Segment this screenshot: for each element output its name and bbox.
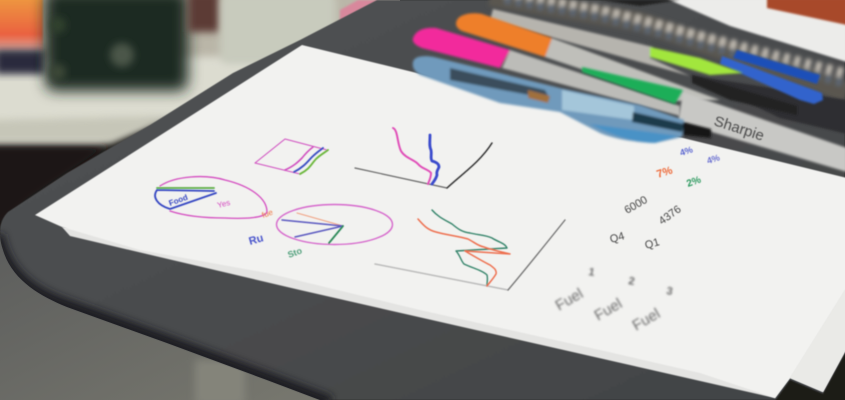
lower sheet edge at right bbox=[790, 287, 845, 392]
pie chart: left with wedge and labels: Yes bbox=[216, 198, 231, 210]
blurred row labels: Fuel bbox=[592, 295, 625, 324]
blurred row labels: Fuel bbox=[630, 305, 663, 334]
blurred row labels: 2 bbox=[627, 275, 636, 288]
lower sheet of paper bbox=[62, 227, 845, 398]
notebook in the top right corner bbox=[490, 0, 845, 92]
line chart: pink and blue bbox=[355, 128, 492, 188]
pie chart: left with wedge and labels: Food bbox=[168, 193, 189, 208]
marker: green Sharpie with label bbox=[582, 67, 845, 172]
Q4 figures: Q1 bbox=[644, 236, 661, 252]
line chart: green and orange bbox=[375, 210, 565, 290]
pie chart: right with segments and labels: Ru bbox=[248, 232, 265, 248]
pie chart: right with segments and labels bbox=[248, 204, 392, 260]
marker: black cap bbox=[692, 75, 797, 115]
legend percentages: 2% bbox=[685, 175, 703, 190]
handwritten figures table bbox=[552, 144, 721, 334]
Q4 figures bbox=[609, 194, 684, 252]
pie chart: right with segments and labels: Sto bbox=[286, 245, 304, 260]
translucent blue pen bbox=[413, 56, 711, 143]
dark shadow region under markers bbox=[690, 75, 845, 134]
red box on notebook bbox=[767, 0, 845, 25]
marker: green Sharpie with label: Sharpie bbox=[712, 113, 766, 145]
Q4 figures: 4376 bbox=[657, 203, 684, 227]
Q4 figures: Q4 bbox=[609, 230, 626, 246]
marker: blue bbox=[720, 56, 823, 104]
blurred row labels: Fuel bbox=[552, 285, 586, 314]
pie chart: right with segments and labels: fue bbox=[261, 207, 275, 220]
legend percentages bbox=[655, 144, 721, 190]
legend percentages: 4% bbox=[679, 144, 694, 158]
notebook page bbox=[665, 0, 845, 62]
legend percentages: 7% bbox=[655, 164, 674, 181]
marker: lime green with grey barrel bbox=[490, 9, 743, 76]
blurred row labels bbox=[552, 266, 674, 334]
legend percentages: 4% bbox=[706, 152, 721, 166]
blurred row labels: 1 bbox=[587, 266, 596, 279]
marker: dark blue bbox=[733, 50, 820, 84]
spiral binding bbox=[490, 0, 845, 92]
Q4 figures: 6000 bbox=[622, 194, 650, 217]
icon: stacked area sketch bbox=[255, 139, 328, 174]
dark corner under paper bbox=[775, 350, 845, 400]
marker: orange with grey barrel bbox=[456, 13, 720, 101]
blurred row labels: 3 bbox=[665, 285, 674, 298]
marker: pink with grey barrel bbox=[413, 28, 680, 116]
pie chart: left with wedge and labels bbox=[155, 177, 267, 218]
